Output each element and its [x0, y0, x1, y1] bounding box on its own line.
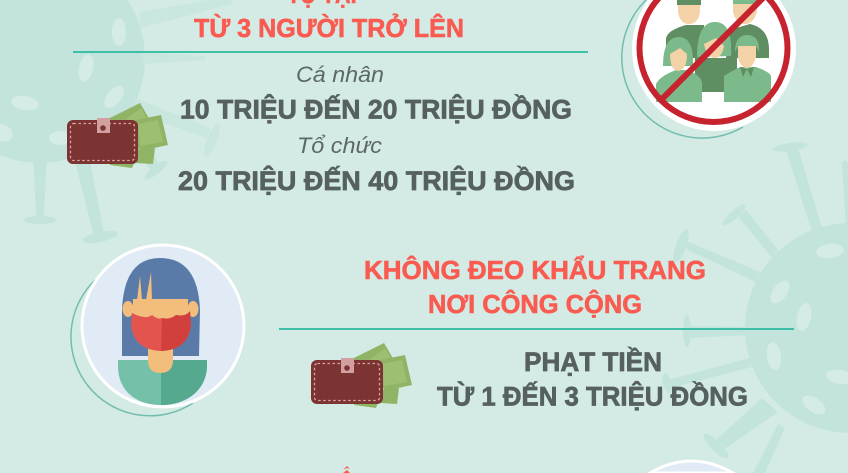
heading: gathering fine: [194, 0, 464, 43]
fine text: no mask: [437, 347, 748, 412]
background virus: top left: [0, 0, 232, 246]
front left woman: [656, 37, 702, 102]
fine text: no mask: TỪ 1 ĐẾN 3 TRIỆU ĐỒNG: [437, 382, 748, 412]
background virus: right: [661, 141, 848, 473]
fine text: individuals and organisations: 10 TRIỆU ĐẾN 20 TRIỆU ĐỒNG: [180, 94, 572, 124]
back left man: [666, 0, 704, 58]
heading: gathering fine: TỪ 3 NGƯỜI TRỞ LÊN: [194, 12, 464, 43]
icon: next circle, cropped: [650, 461, 733, 473]
next heading diacritic, cropped: [343, 466, 350, 473]
icon: wallet with money, top: [67, 103, 168, 168]
fine text: no mask: PHẠT TIỀN: [524, 347, 662, 377]
fine text: individuals and organisations: Cá nhân: [296, 62, 384, 87]
icon: woman wearing mask: [71, 245, 244, 416]
prohibition sign: [640, 0, 788, 122]
heading: no mask: KHÔNG ĐEO KHẨU TRANG: [364, 255, 706, 285]
fine text: individuals and organisations: Tổ chức: [297, 133, 382, 158]
icon: no gathering: [622, 0, 796, 138]
back right man: [726, 0, 769, 58]
fine text: individuals and organisations: [178, 62, 575, 196]
heading: no mask: [364, 255, 706, 319]
heading: no mask: NƠI CÔNG CỘNG: [428, 289, 642, 319]
centre person: [695, 22, 737, 92]
icon: wallet with money, bottom: [311, 343, 412, 408]
fine text: individuals and organisations: 20 TRIỆU ĐẾN 40 TRIỆU ĐỒNG: [178, 166, 575, 196]
front right man: [724, 35, 771, 102]
